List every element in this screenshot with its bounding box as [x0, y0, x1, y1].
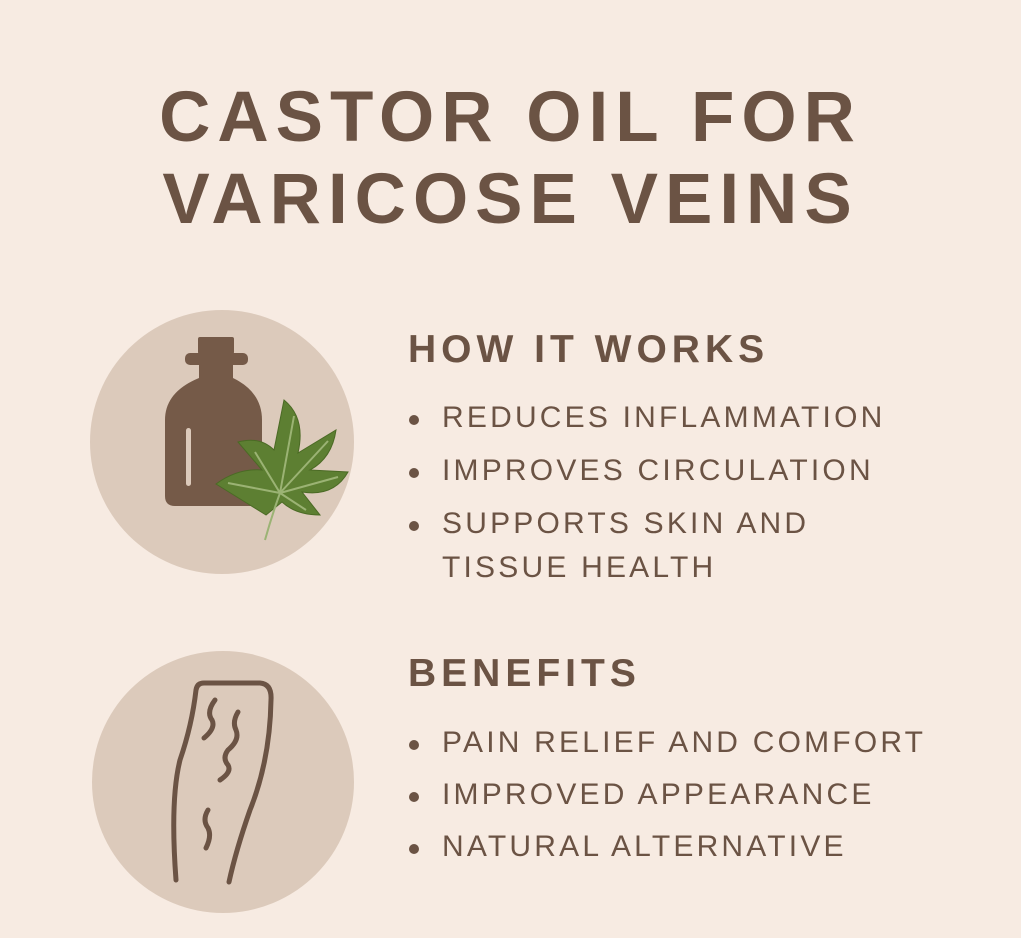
list: how it works: REDUCES INFLAMMATION [442, 401, 885, 434]
list: how it works: TISSUE HEALTH [442, 551, 716, 584]
list: how it works: SUPPORTS SKIN AND [442, 507, 809, 540]
list: benefits: NATURAL ALTERNATIVE [442, 830, 847, 863]
title: CASTOR OIL FOR [159, 78, 862, 157]
heading: how it works: HOW IT WORKS [408, 328, 769, 371]
list: benefits [409, 726, 926, 863]
list: how it works: IMPROVES CIRCULATION [442, 454, 874, 487]
title: VARICOSE VEINS [162, 160, 859, 239]
heading: benefits: BENEFITS [408, 652, 641, 695]
icon: oil bottle with leaf [90, 310, 354, 574]
icon: leg with varicose veins [92, 651, 354, 913]
title [159, 78, 862, 239]
list: benefits: IMPROVED APPEARANCE [442, 778, 875, 811]
list: how it works [409, 401, 885, 584]
list: benefits: PAIN RELIEF AND COMFORT [442, 726, 926, 759]
